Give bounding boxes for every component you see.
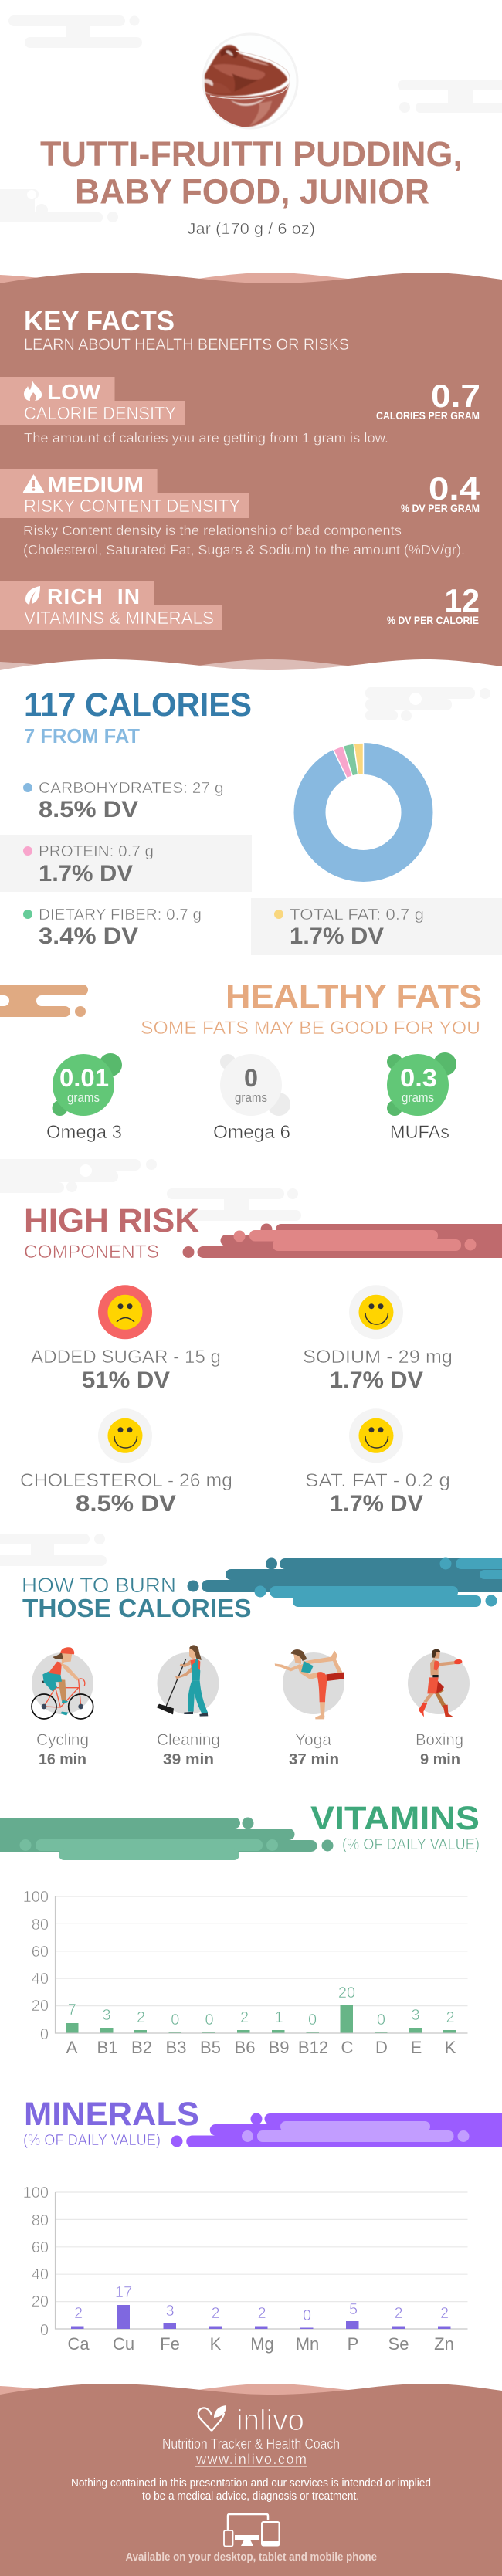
activity: yoga: Yoga [295,1731,331,1749]
stat: mufas: 0.3 [400,1064,437,1092]
bar chart: minerals: 40 [32,2266,49,2283]
disclaimer: Nothing contained in this presentation and our services is intended or implied [71,2476,431,2490]
icon: happy face [349,1285,403,1339]
item: saturated fat: 1.7% DV [330,1491,423,1517]
legend: carbohydrates: 8.5% DV [39,797,138,822]
background cloud: behind high risk [167,1188,301,1221]
heading: how to burn those calories [22,1574,252,1622]
key fact: medium risky content density: RISKY CONTENT DENSITY [24,496,240,516]
key fact: medium risky content density: MEDIUM [47,473,144,497]
heading: high risk: COMPONENTS [24,1242,159,1263]
key fact: medium risky content density: 0.4 [429,470,480,507]
bar chart: minerals: Zn [434,2334,454,2354]
background cloud: left of high risk [0,1159,157,1193]
key fact: rich in vitamins and minerals: % DV PER CALORIE [387,614,479,626]
bar chart: vitamins: D [375,2038,388,2057]
logo: inlivo: inlivo [236,2405,304,2437]
bar chart: vitamins: 60 [32,1944,49,1961]
bar chart: minerals: 0 [303,2307,311,2324]
heading: healthy fats [141,978,482,1039]
background cloud: mid left [0,189,118,222]
banner: minerals shapes [171,2113,502,2147]
heading: healthy fats: HEALTHY FATS [226,978,482,1015]
banner: burn calories shapes [187,1558,502,1607]
banner: healthy fats shape [0,985,88,1017]
item: saturated fat: SAT. FAT - 0.2 g [305,1470,450,1491]
icon: devices [224,2514,280,2547]
bar chart: minerals: Cu [113,2334,134,2354]
legend: dietary fiber: 3.4% DV [39,924,138,949]
bar chart: vitamins: K [445,2038,456,2057]
icon: leaf [25,586,40,605]
legend: protein: PROTEIN: 0.7 g [39,843,154,860]
key fact: low calorie density: The amount of calories you are getting from 1 gram is low. [24,430,388,446]
item: cholesterol [20,1408,232,1517]
donut chart: macronutrients [310,743,417,866]
background cloud: top left [8,15,142,48]
bar chart: vitamins: 20 [32,1998,49,2015]
key fact: low calorie density: LOW [47,380,101,404]
bar chart: vitamins: 0 [377,2012,385,2029]
bar chart: vitamins: B6 [235,2038,255,2057]
bar chart: minerals: Mg [250,2334,274,2354]
legend: total fat: 1.7% DV [290,924,384,949]
heading: vitamins: (% OF DAILY VALUE) [342,1836,480,1853]
panel: footer: Nutrition Tracker & Health Coach [162,2436,340,2452]
icon: sad face [98,1285,152,1339]
bar chart: vitamins: 0 [205,2012,214,2029]
item: added sugar [31,1285,221,1393]
stat: omega 6: Omega 6 [213,1122,290,1143]
stat: omega 3: grams [67,1090,100,1105]
bar chart: vitamins: 40 [32,1971,49,1988]
heading: key facts [24,305,349,354]
bar chart: vitamins: E [411,2038,422,2057]
heading: calories [24,686,252,747]
bar chart: vitamins: B9 [269,2038,289,2057]
icon: flame [24,381,42,401]
icon: cyclist [32,1647,93,1719]
icon: happy face [98,1408,152,1463]
key fact: medium risky content density [0,469,480,558]
activity: cleaning: 39 min [163,1751,214,1768]
bar chart: minerals: 17 [115,2284,132,2301]
bar chart: vitamins: 2 [240,2009,249,2026]
legend: dietary fiber: DIETARY FIBER: 0.7 g [39,907,202,924]
heading: vitamins [310,1800,480,1853]
title [40,134,463,212]
key fact: medium risky content density: Risky Content density is the relationship of bad components [23,523,402,538]
bar chart: minerals: 2 [211,2305,220,2322]
key fact: medium risky content density: (Cholesterol, Saturated Fat, Sugars & Sodium) to the amount (%DV/gr). [23,542,465,558]
bar chart: minerals: P [348,2334,358,2354]
background cloud: calories [365,687,490,721]
bar chart: minerals: 100 [23,2185,49,2201]
item: added sugar: 51% DV [82,1368,170,1393]
panel: footer: Available on your desktop, tablet and mobile phone [125,2551,377,2564]
heading: calories: 7 FROM FAT [24,724,140,747]
bar chart: vitamins: 2 [137,2009,145,2026]
activity: yoga [275,1649,344,1768]
key fact: rich in vitamins and minerals: VITAMINS & MINERALS [24,608,214,628]
bar chart: vitamins: B2 [131,2038,152,2057]
bar chart: minerals: 80 [32,2212,49,2229]
icon: warning triangle [23,474,44,493]
stat: mufas: MUFAs [390,1122,449,1143]
activity: cycling: Cycling [36,1731,89,1749]
bar chart: minerals: 60 [32,2239,49,2256]
heading: key facts: LEARN ABOUT HEALTH BENEFITS OR RISKS [24,336,349,354]
bar chart: vitamins [23,1889,468,2057]
bar chart: vitamins: 1 [274,2009,283,2026]
activity: boxing: Boxing [416,1731,463,1749]
activity: cycling [32,1647,93,1768]
heading: calories: 117 CALORIES [24,686,252,724]
background cloud: top right [398,80,502,113]
item: cholesterol: CHOLESTEROL - 26 mg [20,1470,232,1491]
bar chart: minerals [23,2185,468,2354]
bar chart: vitamins: 20 [338,1985,355,2001]
bar chart: minerals: 0 [40,2322,49,2339]
key fact: low calorie density: 0.7 [431,378,480,414]
legend: protein [0,835,252,892]
title: TUTTI-FRUITTI PUDDING, [40,134,463,174]
disclaimer: to be a medical advice, diagnosis or treatment. [142,2490,359,2503]
legend: dietary fiber [23,907,202,949]
legend: carbohydrates [23,780,224,822]
stat: omega 6: 0 [244,1064,258,1092]
icon: person in yoga pose [275,1649,344,1719]
heading: healthy fats: SOME FATS MAY BE GOOD FOR YOU [141,1018,480,1039]
key fact: medium risky content density: % DV PER GRAM [401,502,480,514]
bar chart: vitamins: 0 [40,2026,49,2043]
item: sodium: SODIUM - 29 mg [303,1347,453,1368]
bar chart: minerals: Fe [160,2334,180,2354]
bar chart: minerals: Se [388,2334,409,2354]
bar chart: vitamins: 3 [102,2007,111,2024]
serving size: Jar (170 g / 6 oz) [187,221,315,238]
stat: omega 6: grams [235,1090,267,1105]
panel: key facts background with waves [0,273,502,680]
icon: person sweeping [157,1645,208,1717]
bar chart: vitamins: 100 [23,1889,49,1906]
bar chart: vitamins: C [341,2038,354,2057]
key fact: low calorie density: CALORIE DENSITY [24,403,176,423]
heading: minerals: (% OF DAILY VALUE) [23,2132,161,2149]
activity: cycling: 16 min [39,1751,86,1768]
panel: footer [0,2384,502,2576]
bar chart: vitamins: B3 [166,2038,186,2057]
stat: omega 3: 0.01 [59,1064,109,1092]
legend: carbohydrates: CARBOHYDRATES: 27 g [39,780,224,797]
disclaimer [71,2476,431,2503]
stat: mufas [387,1052,456,1143]
bar chart: minerals: 5 [349,2301,358,2318]
logo: inlivo [198,2405,304,2437]
activity: boxing: 9 min [420,1751,460,1768]
heading: minerals [23,2096,199,2149]
title: BABY FOOD, JUNIOR [75,171,429,212]
bar chart: vitamins: B1 [97,2038,117,2057]
bar chart: vitamins: B5 [200,2038,221,2057]
item: saturated fat [305,1408,450,1517]
banner: high risk shapes [182,1223,502,1258]
background cloud: above burn section [0,1534,107,1566]
legend: protein: 1.7% DV [39,861,133,886]
legend: total fat: TOTAL FAT: 0.7 g [290,907,424,924]
bar chart: vitamins: A [66,2038,78,2057]
bar chart: minerals: 2 [74,2305,83,2322]
item: sodium: 1.7% DV [330,1368,423,1393]
heading: how to burn those calories: THOSE CALORIES [22,1594,252,1622]
stat: omega 3 [46,1053,122,1143]
icon: happy face [349,1408,403,1463]
bar chart: minerals: 2 [440,2305,449,2322]
bar chart: minerals: Mn [296,2334,319,2354]
link: website: www.inlivo.com [195,2452,307,2467]
heading: high risk: HIGH RISK [24,1202,199,1239]
bar chart: minerals: Ca [67,2334,90,2354]
item: added sugar: ADDED SUGAR - 15 g [31,1347,221,1368]
bar chart: minerals: 20 [32,2293,49,2310]
activity: cleaning [157,1645,220,1768]
banner: vitamins shapes [0,1818,334,1860]
stat: mufas: grams [402,1090,434,1105]
bar chart: vitamins: 0 [308,2012,317,2029]
heading: key facts: KEY FACTS [24,305,175,337]
stat: omega 6 [213,1054,290,1143]
bar chart: vitamins: B12 [298,2038,328,2057]
food image: pudding in glass bowl [203,34,297,128]
key fact: low calorie density [0,377,480,446]
activity: boxing [408,1649,470,1768]
bar chart: vitamins: 2 [446,2009,455,2026]
key fact: low calorie density: CALORIES PER GRAM [376,409,480,422]
key fact: rich in vitamins and minerals: 12 [445,582,480,619]
heading: minerals: MINERALS [24,2096,199,2133]
key fact: rich in vitamins and minerals: RICH IN [47,585,140,608]
item: cholesterol: 8.5% DV [76,1491,176,1517]
heading: how to burn those calories: HOW TO BURN [22,1574,176,1597]
bar chart: minerals: 2 [394,2305,403,2322]
bar chart: vitamins: 7 [68,2001,76,2018]
bar chart: vitamins: 80 [32,1917,49,1934]
stat: omega 3: Omega 3 [46,1122,122,1143]
bar chart: minerals: 3 [165,2303,175,2320]
bar chart: minerals: 2 [257,2305,266,2322]
heading: vitamins: VITAMINS [310,1800,480,1837]
bar chart: vitamins: 3 [411,2007,420,2024]
key fact: rich in vitamins and minerals [0,581,480,630]
item: sodium [303,1285,453,1393]
bar chart: minerals: K [210,2334,222,2354]
heading: high risk [24,1202,199,1263]
bar chart: vitamins: 0 [171,2012,179,2029]
legend: total fat [251,898,502,955]
icon: boxer [419,1649,462,1717]
activity: cleaning: Cleaning [157,1731,220,1749]
activity: yoga: 37 min [289,1751,339,1768]
